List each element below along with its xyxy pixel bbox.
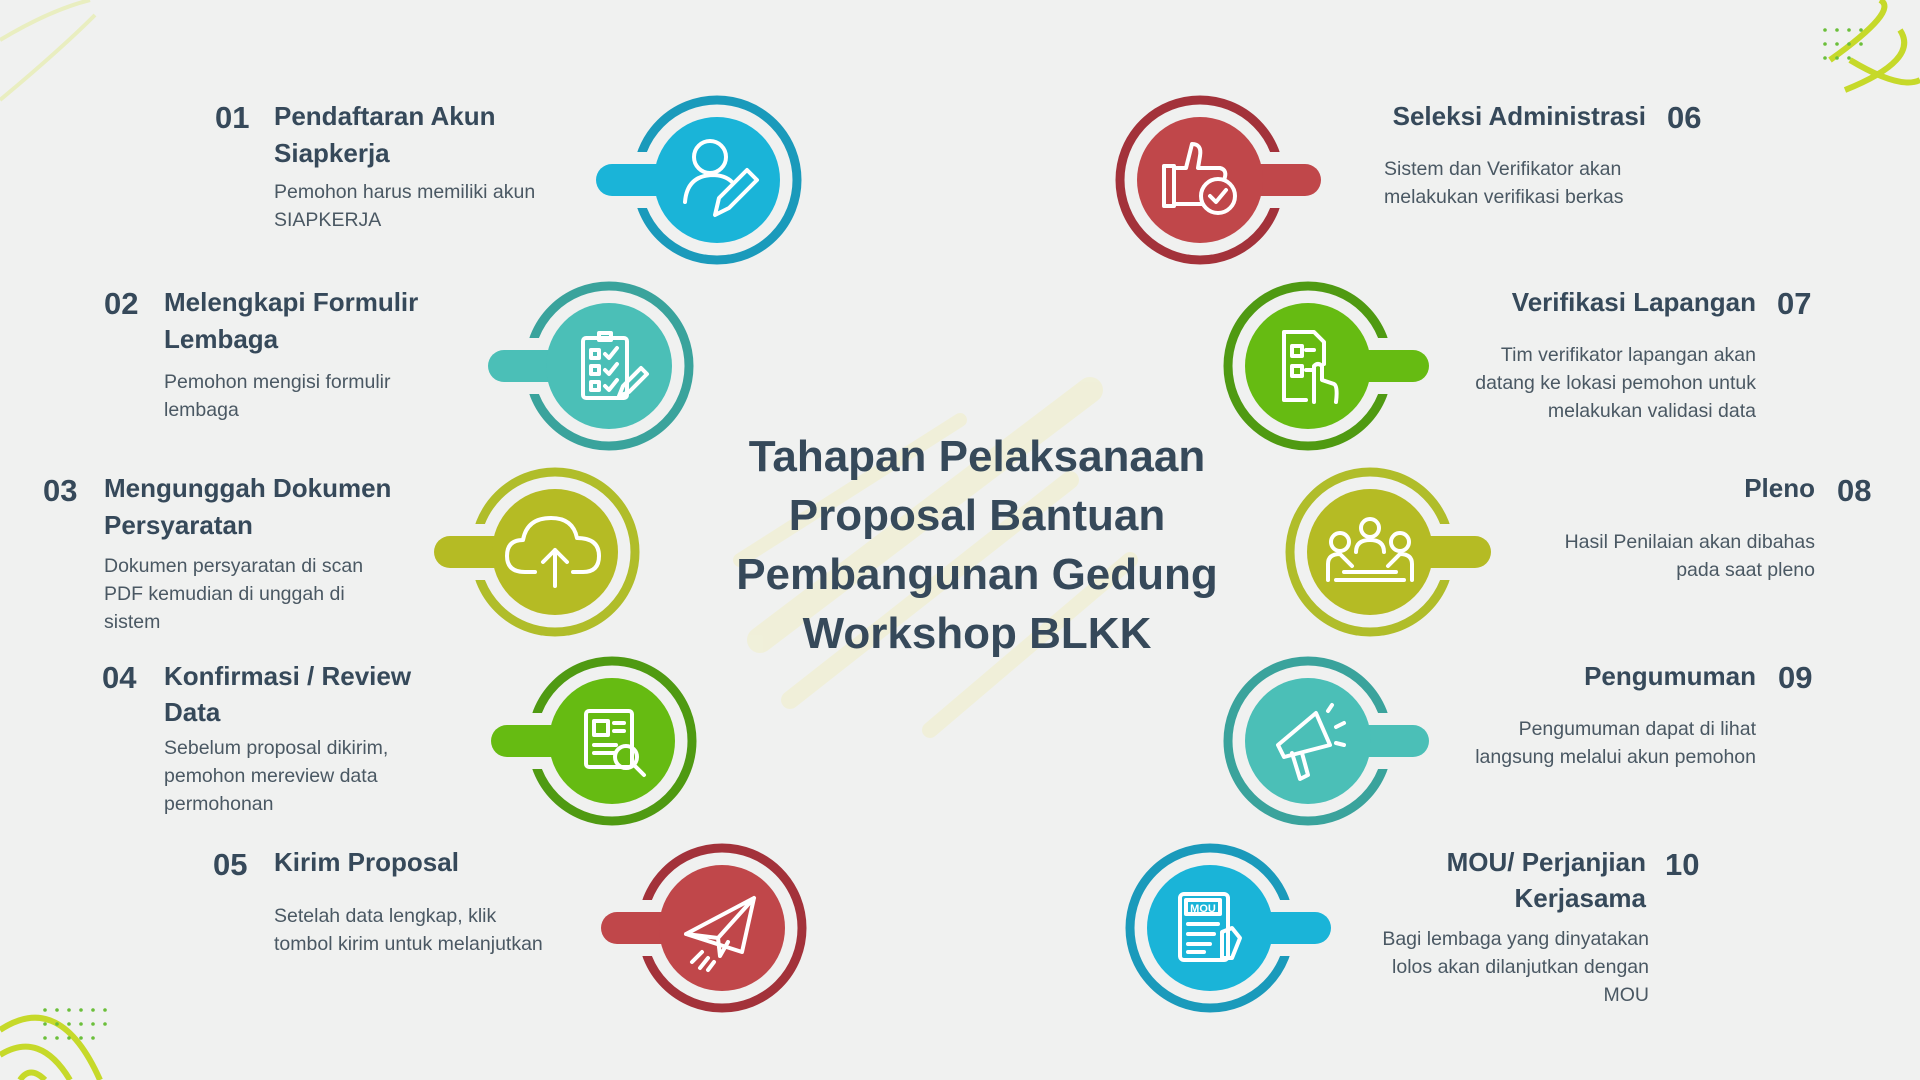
icon 09	[1228, 661, 1433, 821]
step 05 text: Kirim Proposal	[274, 847, 459, 877]
step 06 text: Sistem dan Verifikator akan	[1384, 158, 1621, 180]
corner decoration top-right	[1823, 0, 1920, 90]
title: Workshop BLKK	[803, 609, 1152, 658]
step 10 text: MOU/ Perjanjian	[1447, 847, 1646, 877]
step 03 text: 03	[43, 473, 77, 508]
icon 02	[484, 286, 689, 446]
step 07 text: Tim verifikator lapangan akan	[1501, 344, 1756, 366]
step 03 text: PDF kemudian di unggah di	[104, 583, 345, 605]
step 06 text: Seleksi Administrasi	[1393, 101, 1646, 131]
step 01 text: Siapkerja	[274, 138, 390, 168]
icon 08	[1290, 472, 1495, 632]
icon 06	[1120, 100, 1325, 260]
step 07 text: melakukan validasi data	[1548, 400, 1756, 422]
step 02 text: lembaga	[164, 399, 239, 421]
step 08 text: pada saat pleno	[1676, 559, 1815, 581]
step 04 text: pemohon mereview data	[164, 765, 378, 787]
step 08 text: 08	[1837, 473, 1871, 508]
step 04 text: Data	[164, 697, 221, 727]
step 07 text	[1475, 286, 1811, 422]
icon 07	[1228, 286, 1433, 446]
icon 03	[430, 472, 635, 632]
step 05 text: 05	[213, 847, 247, 882]
step 06 text: melakukan verifikasi berkas	[1384, 186, 1624, 208]
step 09 text: Pengumuman dapat di lihat	[1519, 718, 1757, 740]
step 02 text: Melengkapi Formulir	[164, 287, 418, 317]
step 03 text: Mengunggah Dokumen	[104, 473, 391, 503]
step 03 text: Persyaratan	[104, 510, 253, 540]
icon 10: MOU	[1190, 903, 1216, 915]
decorative streaks	[740, 390, 1130, 730]
step 07 text: 07	[1777, 286, 1811, 321]
step 04 text	[102, 660, 412, 815]
step 04 text: Konfirmasi / Review	[164, 661, 412, 691]
step 10 text: Kerjasama	[1514, 883, 1647, 913]
step 04 text: 04	[102, 660, 137, 695]
step 01 text: 01	[215, 100, 249, 135]
step 02 text	[104, 286, 418, 421]
step 01 text	[215, 100, 535, 231]
step 02 text: Lembaga	[164, 324, 279, 354]
icon 04	[487, 661, 692, 821]
corner decoration bottom-left	[0, 1008, 107, 1080]
step 10 text: Bagi lembaga yang dinyatakan	[1382, 928, 1649, 950]
step 09 text: 09	[1778, 660, 1812, 695]
step 04 text: Sebelum proposal dikirim,	[164, 737, 388, 759]
step 10 text: lolos akan dilanjutkan dengan	[1392, 956, 1649, 978]
step 10 text: 10	[1665, 847, 1699, 882]
icon 05	[597, 848, 802, 1008]
step 08 text	[1565, 473, 1871, 581]
step 01 text: Pemohon harus memiliki akun	[274, 181, 535, 203]
step 02 text: 02	[104, 286, 138, 321]
title: Proposal Bantuan	[789, 491, 1165, 540]
step 10 text: MOU	[1604, 984, 1649, 1006]
step 09 text	[1475, 660, 1812, 768]
title	[736, 432, 1218, 658]
step 02 text: Pemohon mengisi formulir	[164, 371, 391, 393]
icon 10	[1130, 848, 1335, 1008]
step 03 text	[43, 473, 391, 633]
step 01 text: Pendaftaran Akun	[274, 101, 496, 131]
step 08 text: Hasil Penilaian akan dibahas	[1565, 531, 1815, 553]
step 04 text: permohonan	[164, 793, 274, 815]
step 05 text	[213, 847, 543, 955]
step 01 text: SIAPKERJA	[274, 209, 381, 231]
step 07 text: datang ke lokasi pemohon untuk	[1475, 372, 1756, 394]
step 10 text	[1382, 847, 1699, 1006]
step 06 text: 06	[1667, 100, 1701, 135]
step 05 text: Setelah data lengkap, klik	[274, 905, 496, 927]
corner decoration top-left	[0, 0, 95, 100]
step 09 text: langsung melalui akun pemohon	[1475, 746, 1756, 768]
step 08 text: Pleno	[1744, 473, 1815, 503]
step 07 text: Verifikasi Lapangan	[1512, 287, 1756, 317]
step 06 text	[1384, 100, 1701, 208]
icon 01	[592, 100, 797, 260]
step 03 text: sistem	[104, 611, 160, 633]
step 05 text: tombol kirim untuk melanjutkan	[274, 933, 543, 955]
title: Tahapan Pelaksanaan	[749, 432, 1205, 481]
step 03 text: Dokumen persyaratan di scan	[104, 555, 363, 577]
step 09 text: Pengumuman	[1584, 661, 1756, 691]
title: Pembangunan Gedung	[736, 550, 1218, 599]
